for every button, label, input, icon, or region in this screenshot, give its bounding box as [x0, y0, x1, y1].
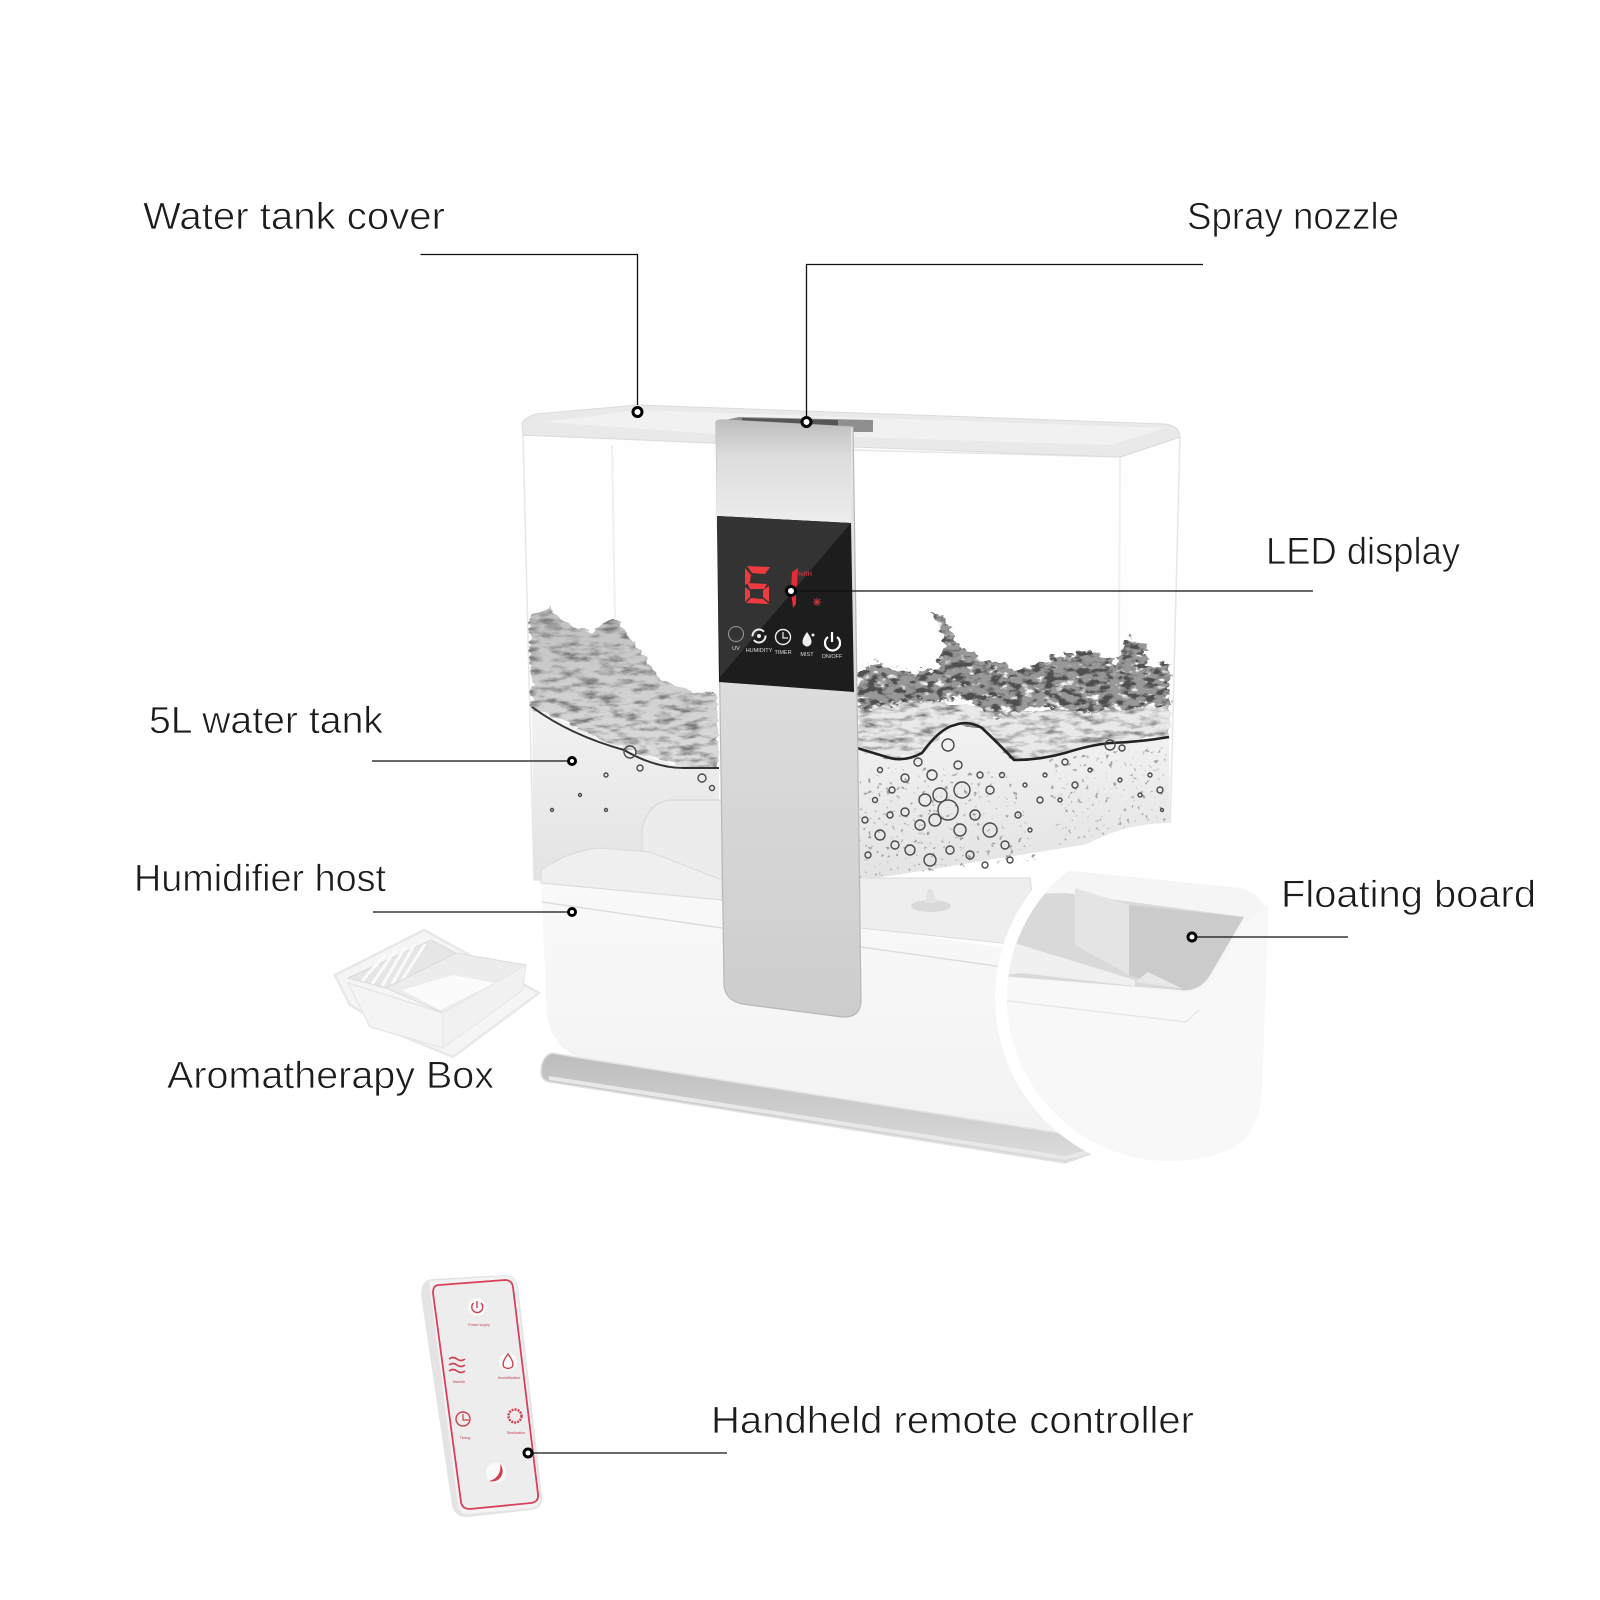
compartment floor [402, 975, 495, 1010]
mist button: MIST [800, 652, 814, 658]
front wall [1000, 905, 1268, 1165]
base plate [541, 1053, 1097, 1163]
grille compartment [348, 940, 456, 988]
timer button: TIMER [774, 650, 792, 656]
floating board [1005, 943, 1135, 986]
drop button: Humidification [498, 1376, 520, 1380]
leader: humidifier host [373, 908, 576, 916]
red indicator [813, 598, 821, 606]
tank inner verticals [612, 445, 1120, 830]
timing button: Timing [460, 1436, 470, 1440]
lens white ring [995, 823, 1345, 1173]
red outline [433, 1280, 538, 1509]
front seam [1000, 1000, 1199, 1022]
cavity right wall [1129, 905, 1244, 990]
waves button: Warmth [453, 1380, 465, 1384]
bubbles [550, 739, 1164, 868]
water body left [532, 707, 719, 880]
timer button [774, 630, 792, 656]
aromatherapy box [335, 930, 539, 1057]
leader: floating board [1188, 933, 1348, 941]
host tray left [541, 848, 722, 900]
label: handheld remote controller: Handheld remote controller [711, 1400, 1194, 1442]
tank lid [522, 405, 1180, 457]
label: humidifier host: Humidifier host [134, 858, 386, 900]
leader: spray nozzle [802, 264, 1203, 426]
lens body [1044, 870, 1268, 992]
remote controller [421, 1275, 542, 1517]
label: aromatherapy box: Aromatherapy Box [167, 1055, 494, 1097]
LED panel [717, 516, 854, 692]
cavity [1000, 893, 1244, 990]
UV button: Sterilization [507, 1431, 525, 1435]
front-left wall [348, 983, 443, 1048]
leader: LED display [786, 586, 1313, 596]
leader: remote [524, 1449, 727, 1457]
detail lens: floating board [995, 823, 1268, 1154]
power button [468, 1298, 490, 1327]
RH unit: %RH [798, 572, 812, 578]
panel gloss [717, 516, 851, 677]
humidity button: HUMIDITY [746, 648, 773, 654]
leader: water tank cover [420, 254, 642, 416]
on/off button: ON/OFF [822, 654, 843, 660]
water surface lines [532, 707, 719, 768]
grille slats [362, 944, 425, 986]
cavity back panel [1075, 888, 1129, 975]
wave right dark crest [857, 613, 1170, 718]
label: 5L water tank: 5L water tank [149, 700, 384, 742]
water tank shell [523, 435, 1180, 880]
humidity button [746, 630, 773, 654]
UV button: UV [732, 646, 740, 652]
digit 1 [791, 568, 798, 608]
inner handle translucent [642, 800, 722, 895]
right wall [443, 965, 526, 1048]
UV button [728, 626, 744, 652]
humidifier unit [522, 405, 1180, 1163]
timing button [456, 1412, 470, 1440]
mist button [800, 632, 814, 658]
power button: Power supply [468, 1323, 490, 1327]
water body right [857, 725, 1170, 880]
UV button [507, 1410, 525, 1435]
leader: water tank [372, 758, 576, 764]
bubble speckle [860, 745, 1168, 878]
host seam lines [542, 902, 1010, 968]
main compartment [386, 953, 526, 1013]
control column [716, 417, 873, 432]
drop button [498, 1353, 520, 1380]
moon button [486, 1463, 506, 1483]
humidifier host body [541, 883, 1100, 1140]
nozzle slit [742, 418, 838, 427]
label: spray nozzle: Spray nozzle [1187, 196, 1399, 238]
label: water tank cover: Water tank cover [143, 196, 445, 238]
wave left [530, 608, 719, 768]
wave right mid light band [857, 700, 1170, 760]
label: LED display: LED display [1266, 531, 1460, 573]
waves button [449, 1358, 465, 1384]
digit 6 [745, 566, 770, 604]
board wedge [1135, 972, 1183, 989]
label: floating board: Floating board [1281, 874, 1536, 916]
on/off button [822, 632, 843, 660]
host tray right with nozzle [860, 878, 1040, 947]
